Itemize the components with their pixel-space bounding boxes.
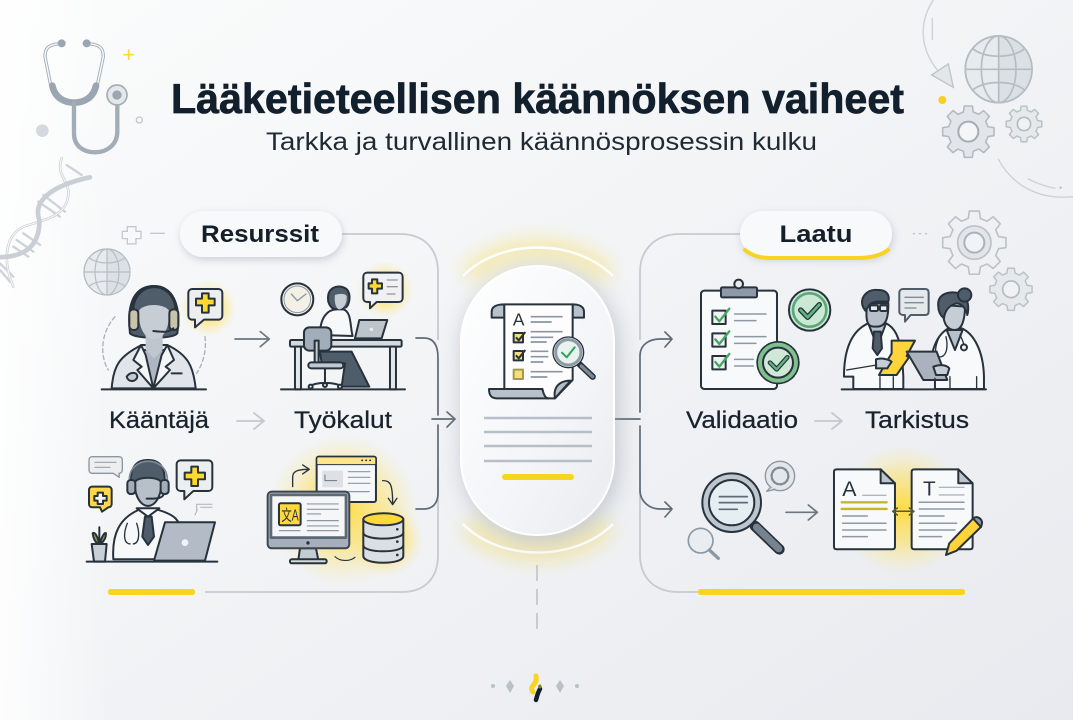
icon: scroll with checklist and magnifier — [489, 304, 593, 398]
icon: monitor, browser window and database — [268, 435, 423, 585]
icon: DNA decoration — [0, 158, 90, 287]
arrow: magnifier to documents — [786, 505, 817, 520]
decoration: bottom ornament — [481, 676, 579, 700]
icon: doctor with headset and laptop — [87, 457, 217, 562]
icon: two doctors with clipboard and tablet — [842, 288, 986, 389]
connector: left bracket into centre — [416, 338, 455, 509]
arrow: Kääntäjä to Työkalut — [237, 413, 264, 429]
title: Lääketieteellisen käännöksen vaiheet — [171, 75, 904, 122]
icon: person at desk with clock — [281, 262, 413, 389]
accent bar: centre — [502, 474, 574, 480]
icon: clipboard checklist with badges — [701, 280, 830, 389]
arrow: Validaatio to Tarkistus — [815, 413, 842, 429]
label: Kääntäjä: Kääntäjä — [109, 407, 210, 434]
arrow: translator to tools upper — [235, 332, 269, 347]
heading pill: Resurssit — [180, 211, 342, 257]
label: Validaatio: Validaatio — [686, 407, 798, 434]
heading pill: Resurssit: Resurssit — [201, 221, 319, 248]
text placeholder lines — [484, 418, 592, 461]
icon: globe left — [84, 249, 130, 295]
heading pill: Laatu — [740, 211, 892, 258]
icon: translator with headset — [102, 280, 237, 389]
accent bar: Laatu — [698, 589, 965, 595]
icon: magnifier with document lines — [688, 461, 795, 558]
label: Tarkistus: Tarkistus — [865, 407, 969, 434]
icon: source and target documents with pencil — [834, 445, 982, 575]
icon: gears top right — [943, 106, 1042, 157]
icon: scroll with checklist and magnifier: A — [513, 309, 525, 329]
icon: source and target documents with pencil: T — [923, 478, 936, 501]
accent bar: Resurssit — [108, 589, 195, 595]
label: Työkalut: Työkalut — [294, 407, 392, 434]
panel outline: Laatu — [640, 234, 740, 592]
subtitle: Tarkka ja turvallinen käännösprosessin kulku — [266, 128, 817, 156]
centre glow arcs — [463, 248, 613, 552]
connector: dashed below centre — [536, 565, 538, 632]
icon: source and target documents with pencil: A — [842, 477, 857, 501]
heading pill: Laatu: Laatu — [780, 221, 852, 248]
decoration: top right arcs and globe — [923, 0, 1073, 197]
icon: monitor, browser window and database: 文A — [281, 508, 299, 525]
icon: stethoscope decoration — [36, 39, 142, 152]
icon: gears right of Laatu — [913, 211, 1032, 310]
panel outline: Resurssit — [205, 234, 438, 592]
panel: centre document card — [461, 266, 614, 535]
connector: right bracket out of centre — [615, 332, 672, 517]
decoration: plus and dash — [122, 227, 165, 244]
